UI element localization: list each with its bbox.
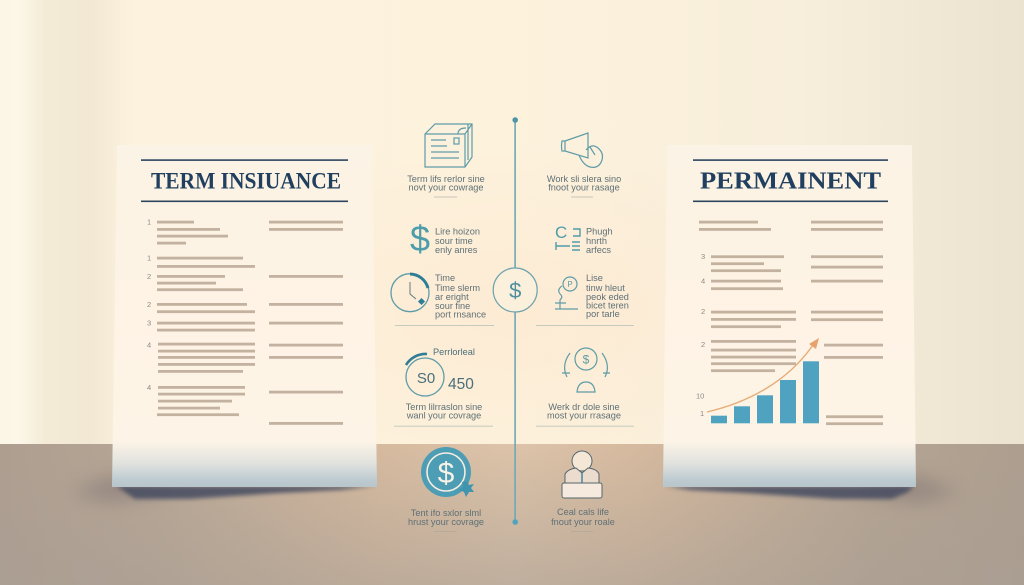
text block: like: bicet teren <box>586 300 629 310</box>
text block: plan: arfecs <box>586 245 611 255</box>
text block: lower left: Term lilrraslon sine <box>406 402 482 412</box>
text block: time: ar eright <box>435 292 469 302</box>
text block: top right <box>547 174 621 198</box>
text block: top left: Term lifs rerlor sine <box>407 174 485 184</box>
text block: lower left: wanl your covrage <box>406 410 481 420</box>
icon: plant with coin: P <box>567 280 573 289</box>
text lines: permanent left column <box>699 221 796 372</box>
icon: clock <box>391 274 429 312</box>
text block: bottom left: Tent ifo sxlor slml <box>411 508 481 518</box>
text block: plan: hnrth <box>586 236 607 246</box>
row numbers: term: 1 <box>147 254 151 262</box>
bar chart with growth arrow <box>707 338 819 423</box>
icon: person at desk <box>562 451 602 498</box>
row numbers: term: 1 <box>147 218 151 226</box>
text block: like: peok eded <box>586 292 629 302</box>
text block: bottom right: fnout your roale <box>551 517 615 527</box>
icon: dollar badge <box>421 447 474 497</box>
text block: horizon: sour time <box>435 236 473 246</box>
heading: permanent: PERMAINENT <box>700 168 881 194</box>
text lines: term right column <box>269 221 343 425</box>
text block: like: Lise <box>586 273 603 283</box>
text block: lower right <box>536 402 634 427</box>
icon: premium dial: Perrlorleal <box>433 347 475 357</box>
text block: time: port rnsance <box>435 310 486 320</box>
row numbers: permanent: 10 <box>696 392 704 400</box>
icon: premium dial <box>406 347 475 396</box>
row numbers: permanent: 3 <box>701 252 705 261</box>
row numbers: permanent: 2 <box>701 307 705 316</box>
text block: top left <box>407 174 485 198</box>
center divider with dollar medallion <box>493 117 537 525</box>
text lines: permanent right column <box>811 221 883 425</box>
text block: time: Time slerm <box>435 283 480 293</box>
row numbers: term: 2 <box>147 272 151 281</box>
center divider with dollar medallion: $ <box>509 278 521 303</box>
text lines: term left column <box>157 221 255 416</box>
text block: lower left <box>394 402 493 427</box>
text block: bottom right: Ceal cals life <box>557 507 609 517</box>
text block: bottom left: hrust your covrage <box>408 517 484 527</box>
panel: term insurance document <box>70 145 377 503</box>
icon: premium dial: S0 <box>417 370 435 387</box>
row numbers: term: 3 <box>147 318 151 328</box>
row numbers: permanent: 1 <box>700 409 704 418</box>
icon: megaphone and hand <box>562 133 602 167</box>
icon: stacked documents <box>425 124 472 167</box>
row numbers: term: 4 <box>147 383 151 392</box>
heading: term insurance: TERM INSIUANCE <box>151 168 341 194</box>
icon: dollar cycle <box>562 348 610 392</box>
row numbers: term: 4 <box>147 340 151 350</box>
row numbers: term <box>147 218 151 392</box>
text block: time <box>395 273 494 326</box>
row numbers: permanent <box>696 252 705 418</box>
icon: premium dial: 450 <box>448 376 474 393</box>
text block: like: tinw hleut <box>586 283 625 293</box>
text block: top right: Work sli slera sino <box>547 174 621 184</box>
text block: horizon: enly anres <box>435 245 478 255</box>
panel: permanent document <box>663 145 960 503</box>
text block: lower right: most your rrasage <box>547 410 621 420</box>
text block: time: Time <box>435 273 455 283</box>
text block: top right: fnoot your rasage <box>548 182 620 192</box>
text block: bottom right <box>551 507 615 532</box>
icon: letter glyphs <box>555 223 580 250</box>
icon: plant with coin <box>555 277 578 309</box>
row numbers: term: 2 <box>147 300 151 309</box>
icon: dollar cycle: $ <box>583 352 590 366</box>
text block: plan <box>586 226 613 255</box>
icon: dollar badge: $ <box>438 457 455 490</box>
text block: lower right: Werk dr dole sine <box>548 402 620 412</box>
text block: horizon <box>435 226 480 255</box>
text block: plan: Phugh <box>586 226 613 236</box>
text block: like: por tarle <box>586 309 620 319</box>
row numbers: permanent: 4 <box>701 276 705 286</box>
icon: letter glyphs: C <box>555 223 567 242</box>
icon: dollar sign: $ <box>410 218 430 259</box>
text block: like <box>536 273 634 326</box>
text block: horizon: Lire hoizon <box>435 226 480 236</box>
text block: top left: novt your cowrage <box>408 182 484 192</box>
text block: time: sour fine <box>435 301 470 311</box>
row numbers: permanent: 2 <box>701 340 705 349</box>
text block: bottom left <box>408 508 484 532</box>
floor <box>0 444 1024 585</box>
